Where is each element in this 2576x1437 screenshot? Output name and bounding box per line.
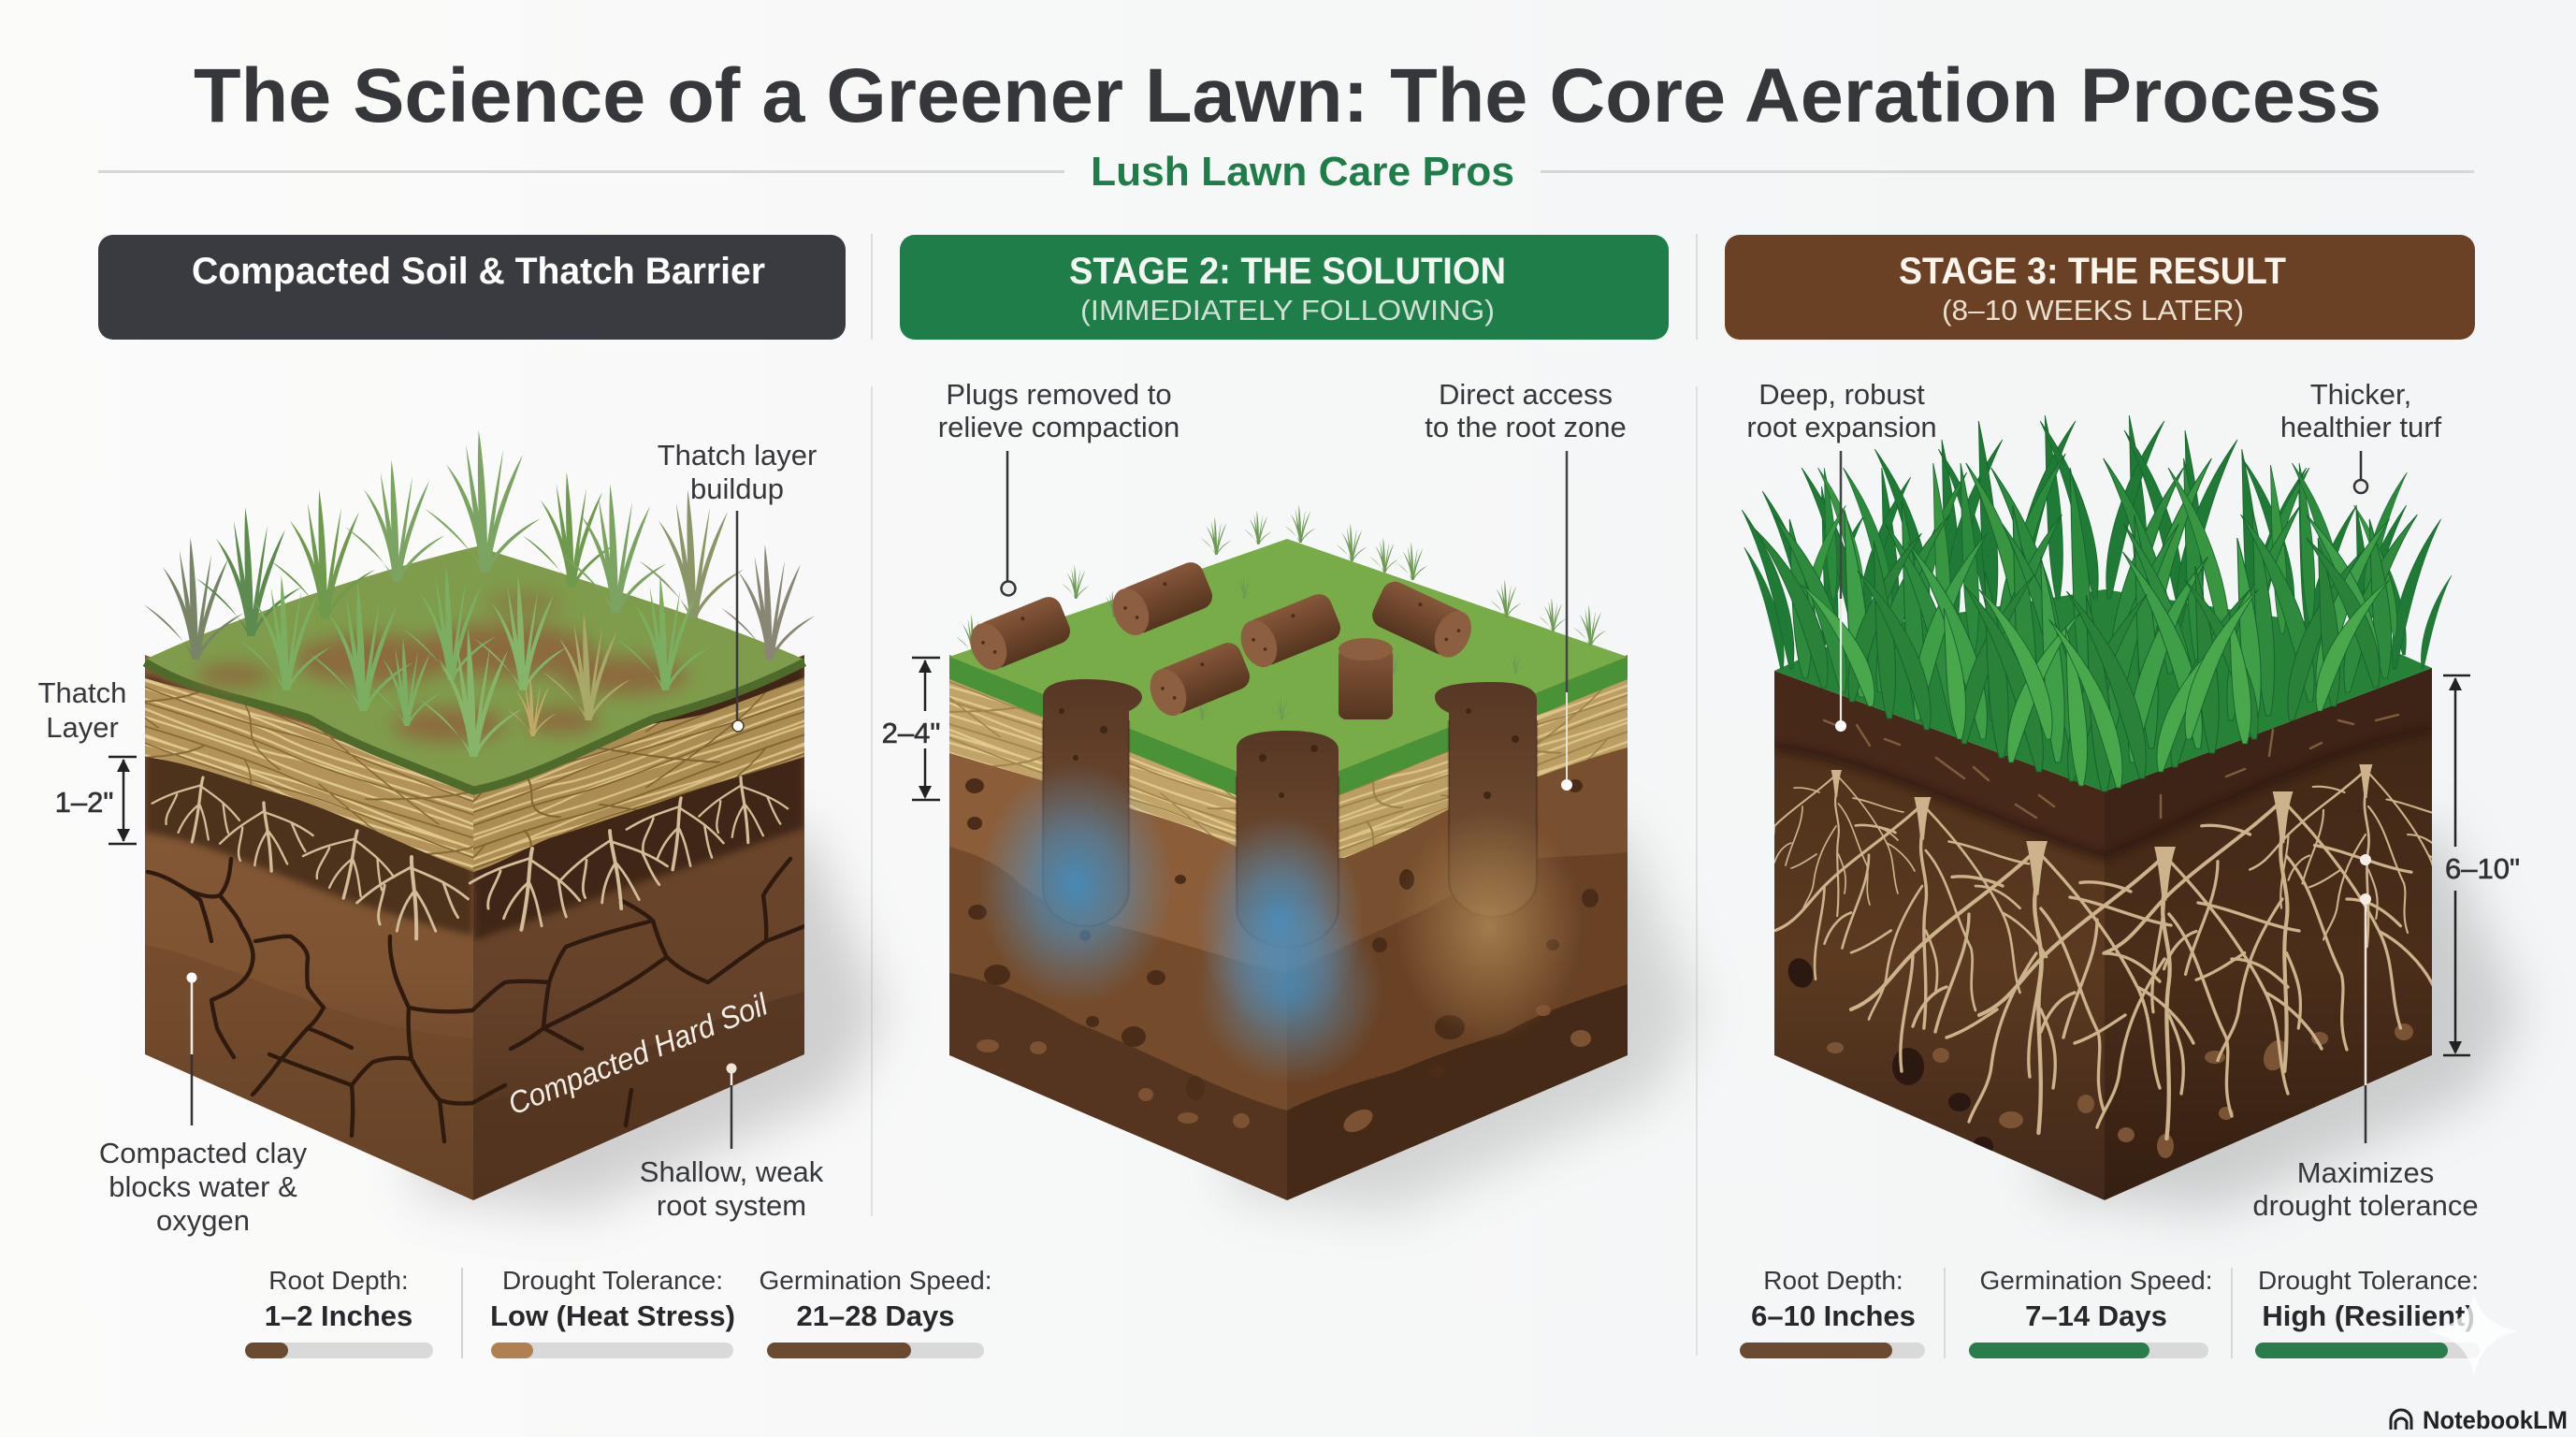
callout: drought tolerance: Maximizes [2297,1156,2434,1189]
subtitle [98,149,2474,195]
dimension: 6–10 inches: 6–10" [2445,852,2520,885]
soil face caption: Compacted Hard Soil [503,986,774,1121]
right soil face [1287,655,1628,1200]
shallow roots [148,771,791,944]
header: stage 3: STAGE 3: THE RESULT [1899,251,2286,292]
callout: thatch layer: Layer [46,711,119,744]
callout: thicker turf [2280,378,2442,493]
aeration holes [1043,679,1537,947]
dimension: 1–2 inches: 1–2" [55,786,113,819]
callout: compacted clay: blocks water & [109,1170,297,1203]
callout: compacted clay [99,973,308,1237]
callout: thicker turf: Thicker, [2310,378,2411,411]
panel: stage 1 soil block [144,430,884,1212]
sparkle watermark [2428,1294,2518,1377]
stat: stage 3 root depth: 6–10 Inches [1751,1299,1916,1332]
callout: compacted clay: Compacted clay [99,1137,308,1169]
callout: deep roots [1746,378,1937,732]
soil plugs [963,559,1479,721]
callout: shallow root system: root system [657,1189,806,1222]
callout: thatch layer: Thatch [38,676,126,709]
callout: drought tolerance [2252,854,2479,1222]
soil faces [1744,668,2464,1200]
dimension: 2–4 inches: 2–4" [882,717,940,749]
stat: stage 3 drought tolerance [2255,1266,2480,1358]
header: stage 2: STAGE 2: THE SOLUTION [1069,251,1506,292]
right soil face [473,655,804,1200]
NotebookLM badge: NotebookLM [2423,1406,2568,1434]
stat: stage 1 drought tolerance: Low (Heat Stress) [490,1299,735,1332]
stat: stage 3 drought tolerance: Drought Tolerance: [2258,1266,2479,1295]
header: stage 2 [900,235,1669,340]
stat: stage 3 germination speed: 7–14 Days [2025,1299,2167,1332]
stat: stage 1 root depth [245,1266,433,1358]
callout: plugs removed: relieve compaction [938,411,1179,443]
callout: plugs removed [938,378,1179,595]
callout: direct access: to the root zone [1425,411,1627,443]
stat: stage 3 germination speed: Germination Speed: [1979,1266,2213,1295]
lawn surface [949,504,1628,791]
header: stage 3 [1725,235,2475,340]
callout: compacted clay: oxygen [156,1204,250,1237]
callout: deep roots: root expansion [1746,411,1937,443]
callout: shallow root system: Shallow, weak [640,1155,824,1188]
stat: stage 3 root depth: Root Depth: [1763,1266,1903,1295]
dimension: 6–10 inches [2443,675,2520,1055]
callout: thicker turf: healthier turf [2280,411,2442,443]
lawn surface with sparse grass [144,430,815,791]
subtitle: Lush Lawn Care Pros [1091,149,1514,195]
soil pebbles [965,778,1599,1137]
left soil face [145,655,473,1200]
panel: stage 3 soil block [1742,415,2521,1212]
left soil face [949,655,1287,1200]
cracks [148,859,804,1141]
stat: stage 1 root depth: 1–2 Inches [265,1299,412,1332]
callout: direct access [1425,378,1627,791]
header: stage 2: (IMMEDIATELY FOLLOWING) [1080,294,1495,327]
stat: stage 1 root depth: Root Depth: [268,1266,409,1295]
thick turf grass [1742,415,2452,791]
stat: stage 1 drought tolerance [490,1266,735,1358]
stat: stage 1 drought tolerance: Drought Tolerance: [502,1266,723,1295]
callout: drought tolerance: drought tolerance [2252,1189,2479,1222]
stat: stage 3 germination speed [1969,1266,2213,1358]
panel: stage 2 soil block [949,504,1698,1212]
header: stage 1 [98,235,846,340]
callout: direct access: Direct access [1439,378,1613,411]
callout: shallow root system [640,1063,824,1222]
water and air glows [977,762,1583,1085]
stat: stage 1 germination speed: 21–28 Days [797,1299,954,1332]
stat: stage 1 germination speed [759,1266,992,1358]
dimension: 1–2 inches [55,757,137,844]
callout: deep roots: Deep, robust [1758,378,1925,411]
header: stage 1: Compacted Soil & Thatch Barrier [192,251,765,292]
callout: plugs removed: Plugs removed to [946,378,1172,411]
stat: stage 3 drought tolerance: High (Resilient) [2262,1299,2475,1332]
stat: stage 3 root depth [1740,1266,1925,1358]
deep root systems [1774,770,1916,917]
dimension: 2–4 inches [882,658,940,800]
stat: stage 1 germination speed: Germination Speed: [759,1266,992,1295]
callout: thatch layer buildup [658,439,817,732]
callout: thatch layer buildup: buildup [690,472,784,505]
title: The Science of a Greener Lawn: The Core Aeration Process [194,53,2381,138]
header: stage 3: (8–10 WEEKS LATER) [1942,294,2244,327]
callout: thatch layer buildup: Thatch layer [658,439,817,472]
